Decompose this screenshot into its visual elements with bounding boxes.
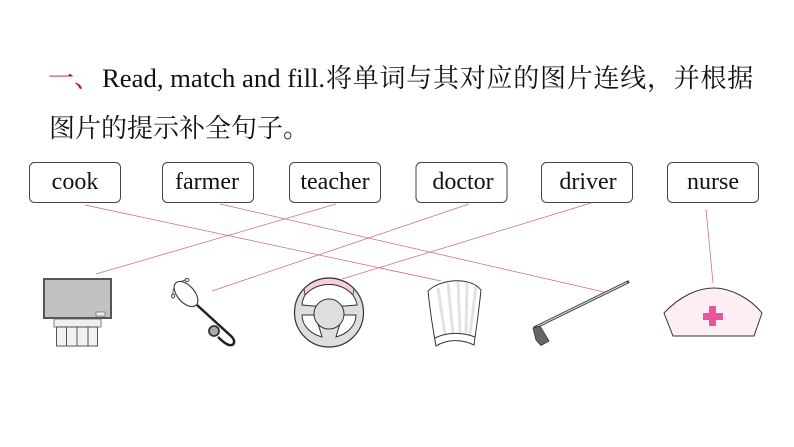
title: instruction text [48,63,754,143]
matching lines [85,203,713,292]
word: doctor: doctor [432,169,494,195]
instruction line 1: 将单词与其对应的图片连线，并根据 [326,64,754,93]
red cross [703,306,723,326]
word: cook [30,162,120,202]
instruction line 2: 图片的提示补全句子。 [49,114,309,143]
icon: blackboard and desk [44,279,111,346]
instruction line 1: Read, match and fill. [102,63,325,93]
word: nurse: nurse [687,169,739,195]
icon: hoe [533,282,629,346]
word: cook: cook [52,169,98,195]
word: farmer: farmer [175,169,239,195]
word: teacher [290,162,380,202]
icon: chef hat [428,281,481,346]
icon: nurse cap [664,288,762,336]
number marker: 一、 [48,64,100,93]
word: driver: driver [559,169,617,195]
word: doctor [416,162,507,202]
word: driver [542,162,632,202]
icon: stethoscope [170,277,234,345]
word: nurse [668,162,758,202]
word: teacher: teacher [300,169,370,195]
word boxes [30,162,758,202]
icon: steering wheel [294,278,364,347]
word: farmer [162,162,254,202]
